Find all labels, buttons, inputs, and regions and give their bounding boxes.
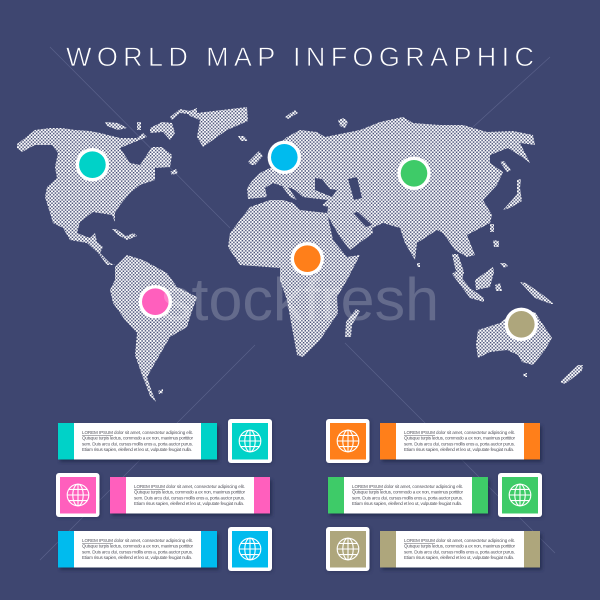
dotted world map: [17, 107, 583, 402]
pin: South America: [139, 285, 172, 318]
Eurasia: [247, 117, 535, 260]
South America: [110, 255, 197, 402]
icon: globe khaki: [326, 527, 371, 572]
North America: [17, 128, 172, 265]
Iceland: [238, 136, 248, 141]
title: WORLD MAP INFOGRAPHIC: [66, 42, 534, 72]
icon: globe cyan: [228, 419, 273, 464]
card text: Etiam risus sapien, eleifend et leo ut, vulputate feugiat nulla.: [82, 447, 192, 452]
card text: LOREM IPSUM dolor sit amet, consectetur adipiscing elit.: [404, 430, 515, 435]
pin: Europe: [268, 141, 301, 174]
pin: Asia: [397, 157, 431, 190]
card: cyan, left top: [58, 423, 219, 462]
card text: LOREM IPSUM dolor sit amet, consectetur adipiscing elit.: [404, 538, 515, 543]
card text: sem. Duis arcu dui, cursus mollis eros a, porta auctor purus.: [82, 441, 193, 446]
Newfoundland: [170, 169, 178, 175]
card: green, right middle: [328, 477, 490, 516]
card text: [82, 430, 193, 452]
New Zealand: [560, 365, 583, 384]
watermark: stockfresh: [161, 266, 439, 333]
Australia: [476, 312, 552, 365]
Cuba and Caribbean: [112, 229, 137, 240]
card text: sem. Duis arcu dui, cursus mollis eros a, porta auctor purus.: [82, 549, 193, 554]
card text: sem. Duis arcu dui, cursus mollis eros a, porta auctor purus.: [404, 549, 515, 554]
card text: Etiam risus sapien, eleifend et leo ut, vulputate feugiat nulla.: [404, 447, 514, 452]
card: orange, right top: [380, 423, 542, 462]
Africa: [228, 200, 360, 357]
card text: Etiam risus sapien, eleifend et leo ut, vulputate feugiat nulla.: [352, 501, 462, 506]
card text: sem. Duis arcu dui, cursus mollis eros a, porta auctor purus.: [134, 495, 245, 500]
card: khaki, right bottom: [380, 531, 542, 570]
icon: globe blue: [228, 527, 273, 572]
Greenland: [187, 107, 248, 147]
icon: globe green: [498, 473, 543, 518]
Arctic islands of Europe: [285, 110, 298, 119]
card: blue, left bottom: [58, 531, 219, 570]
card text: LOREM IPSUM dolor sit amet, consectetur adipiscing elit.: [134, 484, 245, 489]
UK: [248, 151, 263, 165]
pin: Africa: [291, 242, 324, 275]
card text: [404, 430, 515, 452]
card text: Quisque turpis lectus, commodo a ex non, maximus porttitor: [404, 436, 515, 441]
card text: Quisque turpis lectus, commodo a ex non, maximus porttitor: [352, 490, 463, 495]
card text: Etiam risus sapien, eleifend et leo ut, vulputate feugiat nulla.: [404, 555, 514, 560]
card text: Etiam risus sapien, eleifend et leo ut, vulputate feugiat nulla.: [134, 501, 244, 506]
card text: LOREM IPSUM dolor sit amet, consectetur adipiscing elit.: [82, 430, 193, 435]
card text: Quisque turpis lectus, commodo a ex non, maximus porttitor: [82, 544, 193, 549]
card text: [404, 538, 515, 560]
card text: Etiam risus sapien, eleifend et leo ut, vulputate feugiat nulla.: [82, 555, 192, 560]
New Guinea: [520, 282, 554, 304]
icon: globe pink: [56, 473, 101, 518]
card text: Quisque turpis lectus, commodo a ex non, maximus porttitor: [404, 544, 515, 549]
card text: [134, 484, 245, 506]
Madagascar: [345, 309, 360, 337]
card text: Quisque turpis lectus, commodo a ex non, maximus porttitor: [134, 490, 245, 495]
card text: sem. Duis arcu dui, cursus mollis eros a, porta auctor purus.: [352, 495, 463, 500]
icon: globe orange: [326, 419, 371, 464]
card: pink, left middle: [110, 477, 272, 516]
pin: Australia: [505, 308, 538, 341]
card text: LOREM IPSUM dolor sit amet, consectetur adipiscing elit.: [82, 538, 193, 543]
card text: LOREM IPSUM dolor sit amet, consectetur adipiscing elit.: [352, 484, 463, 489]
Asian islands: [500, 161, 511, 172]
Arctic islands: [105, 122, 127, 130]
card text: sem. Duis arcu dui, cursus mollis eros a, porta auctor purus.: [404, 441, 515, 446]
card text: Quisque turpis lectus, commodo a ex non, maximus porttitor: [82, 436, 193, 441]
card text: [352, 484, 463, 506]
pin: North America: [76, 148, 109, 181]
watermark diagonal lines: [40, 47, 555, 560]
card text: [82, 538, 193, 560]
